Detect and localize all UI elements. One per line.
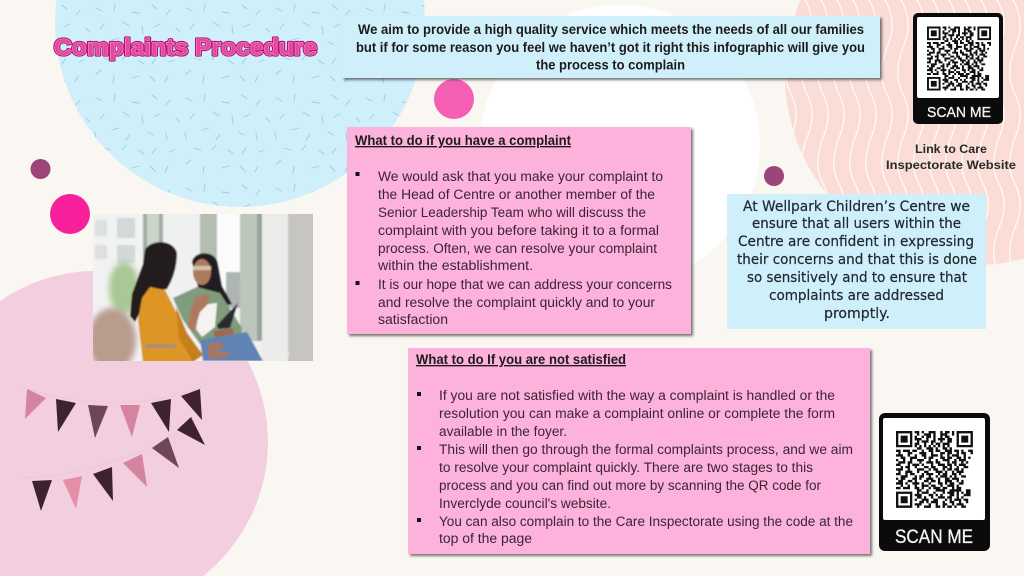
- bullet list: to resolve your complaint quickly. There are two stages to this: [439, 460, 813, 475]
- QR code: Care Inspectorate: SCAN ME: [927, 104, 991, 121]
- QR caption: Link to Care: [915, 144, 987, 156]
- intro text box: but if for some reason you feel we haven’t got it right this infographic will give you: [356, 40, 865, 55]
- background circle: white: [480, 5, 760, 285]
- right woman: [173, 253, 263, 361]
- background circle: peach waves: [785, 0, 1024, 265]
- bullet list: [417, 388, 853, 546]
- dot: large pink: [434, 79, 474, 119]
- bunting flags: [18, 384, 208, 511]
- left woman: [130, 242, 230, 363]
- QR code: Inverclyde council: [879, 413, 990, 551]
- background circle: blue confetti: [55, 0, 425, 207]
- dot: magenta: [50, 194, 90, 234]
- panel: what to do if you are not satisfied: [408, 348, 870, 554]
- QR caption: Inspectorate Website: [886, 160, 1016, 172]
- bullet list: the Head of Centre or another member of the: [378, 187, 655, 202]
- panel: wellpark statement: their concerns and that this is done: [737, 252, 977, 268]
- bullet list: You can also complain to the Care Inspectorate using the code at the: [439, 514, 853, 529]
- bullet list: If you are not satisfied with the way a complaint is handled or the: [439, 388, 835, 403]
- bullet list: top of the page: [439, 531, 532, 546]
- bullet list: complaint with you before taking it to a formal: [378, 223, 659, 238]
- QR code: Care Inspectorate: [913, 13, 1003, 124]
- bullet list: resolution you can make a complaint online or complete the form: [439, 406, 835, 421]
- photo: two women talking: [93, 214, 313, 361]
- QR caption: [886, 144, 1016, 172]
- intro text box: We aim to provide a high quality service which meets the needs of all our families: [358, 22, 864, 37]
- bullet list: Senior Leadership Team who will discuss the: [378, 205, 646, 220]
- panel: wellpark statement: so sensitively and to ensure that: [747, 270, 967, 286]
- panel: wellpark statement: complaints are addressed: [769, 288, 944, 304]
- panel heading: What to do If you are not satisfied: [416, 352, 626, 367]
- dot: purple right: [764, 166, 784, 186]
- bullet list: It is our hope that we can address your concerns: [378, 277, 672, 292]
- title: Complaints Procedure: [54, 34, 317, 60]
- panel: wellpark statement: [727, 194, 986, 329]
- panel: wellpark statement: At Wellpark Children’s Centre we: [743, 199, 970, 215]
- bullet list: process and you can find out more by scanning the QR code for: [439, 478, 822, 493]
- panel: what to do if you have a complaint: [347, 127, 691, 334]
- bullet list: satisfaction: [378, 312, 448, 327]
- title: Complaints Procedure: [54, 34, 317, 60]
- bullet list: process. Often, we can resolve your complaint: [378, 241, 657, 256]
- panel: wellpark statement: promptly.: [824, 306, 890, 322]
- bullet list: and resolve the complaint quickly and to your: [378, 295, 656, 310]
- panel heading: What to do if you have a complaint: [355, 133, 571, 148]
- background circle: pink: [0, 271, 268, 576]
- QR code: Inverclyde council: SCAN ME: [895, 527, 973, 548]
- bullet list: within the establishment.: [377, 258, 533, 273]
- bullet list: This will then go through the formal complaints process, and we aim: [439, 442, 853, 457]
- intro text box: [342, 16, 880, 78]
- bullet list: We would ask that you make your complaint to: [378, 169, 663, 184]
- dot: purple left: [30, 159, 50, 179]
- intro text box: the process to complain: [536, 58, 685, 72]
- panel: wellpark statement: Centre are confident in expressing: [738, 234, 974, 250]
- bullet list: [356, 169, 672, 327]
- bullet list: available in the foyer.: [439, 424, 567, 439]
- panel: wellpark statement: ensure that all users within the: [752, 216, 961, 232]
- bullet list: Inverclyde council's website.: [439, 496, 611, 511]
